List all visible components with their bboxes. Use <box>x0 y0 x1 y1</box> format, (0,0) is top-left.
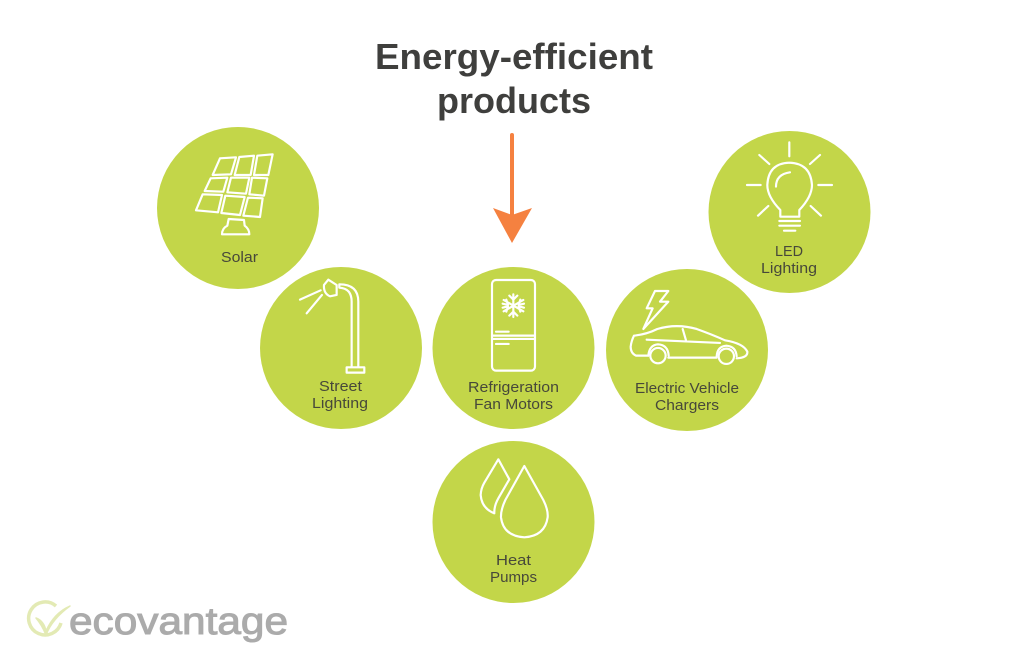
icon: street light <box>300 280 364 373</box>
label: solar: Solar <box>221 249 258 266</box>
panel: solar <box>157 127 319 289</box>
label: street lighting <box>312 378 368 412</box>
label: led lighting <box>761 243 817 277</box>
logo: ecovantage <box>29 601 288 643</box>
label: street lighting: Street <box>319 378 363 395</box>
label: electric vehicle chargers: Electric Vehicle <box>635 380 739 397</box>
label: electric vehicle chargers: Chargers <box>655 397 719 414</box>
label: led lighting: LED <box>775 243 803 260</box>
icon: logo check mark <box>29 602 70 635</box>
label: electric vehicle chargers <box>635 380 739 414</box>
label: heat pumps: Heat <box>496 552 532 569</box>
panel: heat pumps <box>432 441 594 603</box>
icon: refrigerator <box>492 280 535 371</box>
label: led lighting: Lighting <box>761 260 817 277</box>
label: refrigeration fan motors <box>468 379 559 413</box>
label: refrigeration fan motors: Refrigeration <box>468 379 559 396</box>
label: refrigeration fan motors: Fan Motors <box>474 396 553 413</box>
panel: electric vehicle chargers <box>606 269 768 431</box>
title: products <box>437 80 591 121</box>
title <box>375 36 653 121</box>
icon: water drops <box>481 459 548 537</box>
icon: electric car with bolt <box>631 291 747 364</box>
label: heat pumps <box>490 552 537 586</box>
label: heat pumps: Pumps <box>490 569 537 586</box>
icon: solar panel <box>196 154 273 234</box>
panel: refrigeration fan motors <box>432 267 594 429</box>
panel: street lighting <box>260 267 422 429</box>
panel: led lighting <box>708 131 870 293</box>
icon: light bulb <box>747 142 832 231</box>
title: Energy-efficient <box>375 36 653 77</box>
arrow: down to products <box>493 135 532 243</box>
wordmark: ecovantage <box>69 601 288 643</box>
label: street lighting: Lighting <box>312 395 368 412</box>
